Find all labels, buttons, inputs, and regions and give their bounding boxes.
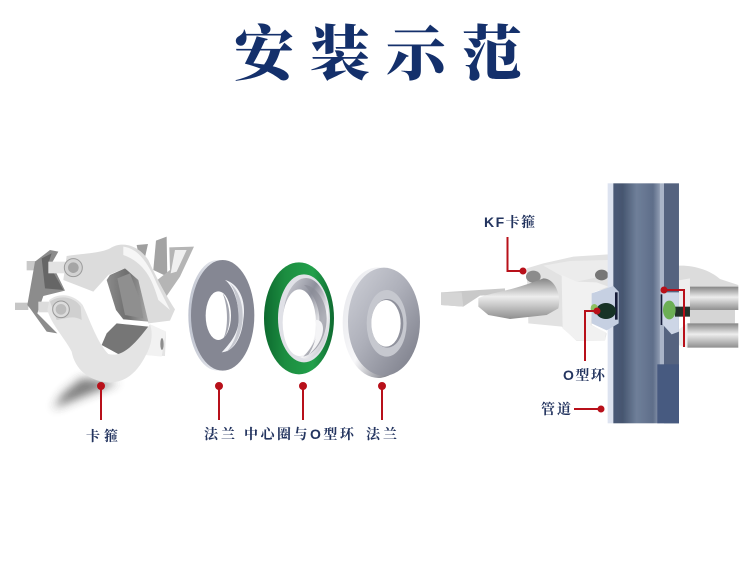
label: KF clamp: KF卡箍	[484, 214, 537, 230]
lower arm	[47, 295, 166, 383]
label: pipe: 管道	[541, 401, 573, 417]
icon: centering ring with green O-ring	[264, 262, 334, 374]
pointer: pipe	[574, 408, 601, 410]
label: flange right: 法兰	[366, 426, 400, 442]
pointer: right section	[664, 290, 684, 347]
pointer dot: KF clamp	[520, 268, 526, 274]
diagram: sectioned clamp on pipe	[441, 183, 738, 423]
flange section right	[661, 292, 690, 334]
label: centering ring and O-ring: 中心圈与O型环	[244, 426, 356, 442]
right clamp body	[672, 266, 738, 348]
pointer: KF clamp	[508, 237, 523, 271]
label: O-ring: O型环	[563, 367, 606, 383]
pipe	[608, 183, 679, 423]
pointer: flange left	[216, 382, 222, 420]
left clamp body	[441, 254, 608, 341]
icon: KF clamp photo	[15, 237, 194, 408]
pointer dot: O-ring	[594, 308, 600, 314]
bolts and back plate	[15, 250, 67, 333]
title: 安装示范	[234, 22, 538, 88]
pointer: O-ring	[585, 311, 597, 361]
pointer dot: right section	[660, 286, 668, 294]
label: flange left: 法兰	[204, 426, 238, 442]
upper arm	[63, 245, 175, 323]
pointer dot: pipe	[598, 406, 604, 412]
pointer: centering ring	[300, 382, 306, 420]
pointer: flange right	[378, 382, 386, 420]
shadow	[53, 378, 118, 408]
label: clamp: 卡箍	[86, 428, 122, 444]
inner openings	[107, 268, 148, 322]
wing nut	[137, 237, 194, 296]
icon: flange right	[343, 267, 420, 378]
icon: flange left	[188, 260, 254, 371]
pointer: clamp	[98, 382, 104, 420]
flange section left	[591, 286, 619, 330]
